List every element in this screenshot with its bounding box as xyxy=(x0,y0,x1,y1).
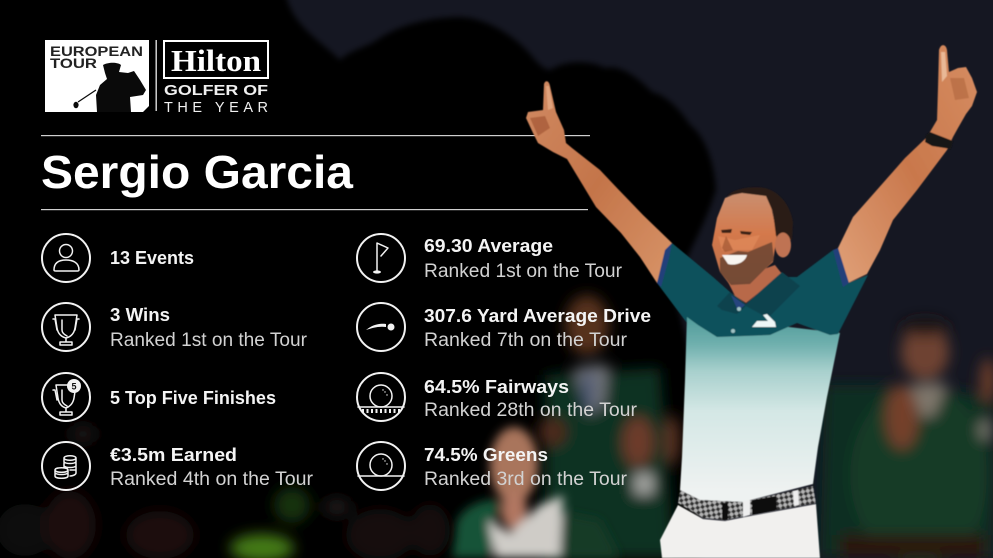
stat: wins xyxy=(42,303,308,351)
stat: driving distance: Ranked 7th on the Tour xyxy=(424,330,628,351)
icon: ball in flight xyxy=(357,303,405,351)
logo: European Tour xyxy=(45,40,149,112)
buckle xyxy=(722,496,777,520)
ear xyxy=(775,232,791,258)
nose shadow xyxy=(722,236,733,252)
white trousers xyxy=(660,504,820,558)
stat: driving distance: 307.6 Yard Average Drive xyxy=(424,305,651,326)
adidas logo xyxy=(752,314,776,327)
shirt dark yoke and sleeves xyxy=(657,243,868,337)
left stats column xyxy=(42,234,314,490)
stat: fairways: Ranked 28th on the Tour xyxy=(424,400,638,421)
neck xyxy=(728,265,782,303)
divider xyxy=(156,40,157,111)
smile xyxy=(722,255,747,265)
belt loops xyxy=(743,490,799,517)
logo: European Tour: TOUR xyxy=(50,56,97,71)
stat: fairways xyxy=(357,373,638,421)
polo shirt xyxy=(657,243,868,502)
blurred crowd, right group xyxy=(820,318,993,558)
icon: ball on green xyxy=(357,442,405,490)
stat: wins: 3 Wins xyxy=(110,304,170,325)
buttons xyxy=(737,307,741,311)
right arm and hand xyxy=(838,45,977,283)
stat: scoring average xyxy=(357,234,623,282)
stat: fairways: 64.5% Fairways xyxy=(424,376,569,397)
wristwatch xyxy=(925,132,953,149)
blurred crowd, centre group xyxy=(538,295,680,558)
icon: trophy xyxy=(42,303,90,351)
player photo: Sergio Garcia celebrating xyxy=(526,45,977,558)
stat: earnings xyxy=(42,442,314,490)
belt xyxy=(678,486,816,520)
horizontal rule above name xyxy=(41,135,590,136)
icon: ball on fairway xyxy=(357,373,405,421)
stat: earnings: €3.5m Earned xyxy=(110,444,237,465)
award title: THE YEAR xyxy=(164,100,268,116)
stat: top five finishes xyxy=(42,373,276,421)
logo: European Tour: EUROPEAN xyxy=(50,44,143,59)
logo: Hilton box: Hilton xyxy=(171,43,261,78)
stat: earnings: Ranked 4th on the Tour xyxy=(110,469,314,490)
icon: golfer silhouette xyxy=(73,63,146,112)
beard stubble xyxy=(720,242,774,285)
stat: greens xyxy=(357,442,628,490)
stat: greens: 74.5% Greens xyxy=(424,444,548,465)
collar xyxy=(717,272,800,318)
hair xyxy=(727,187,793,240)
logos lockup xyxy=(45,40,268,116)
title: player name: Sergio Garcia xyxy=(41,146,353,198)
icon: flag on green xyxy=(357,234,405,282)
stat: driving distance xyxy=(357,303,651,351)
icon: coin stacks xyxy=(42,442,90,490)
stat: events: 13 Events xyxy=(110,247,194,268)
dark tree silhouette xyxy=(0,0,716,558)
cheek highlight xyxy=(718,235,760,250)
stat: events xyxy=(42,234,194,282)
left arm and hand xyxy=(526,81,672,283)
stat: greens: Ranked 3rd on the Tour xyxy=(424,469,628,490)
foreground clapping spectator xyxy=(452,427,620,558)
icon: trophy with five badge: 5 xyxy=(72,382,77,392)
icon: person xyxy=(42,234,90,282)
award title: GOLFER OF xyxy=(164,83,268,99)
stat: scoring average: 69.30 Average xyxy=(424,235,553,256)
blurred crowd, left group xyxy=(0,425,450,558)
eyes xyxy=(721,229,752,235)
horizontal rule below name xyxy=(41,209,588,210)
head xyxy=(712,187,793,285)
stat: wins: Ranked 1st on the Tour xyxy=(110,330,308,351)
sleeve stripes xyxy=(657,243,672,287)
icon: trophy with five badge xyxy=(42,373,90,421)
stat: scoring average: Ranked 1st on the Tour xyxy=(424,261,623,282)
stat: top five finishes: 5 Top Five Finishes xyxy=(110,387,276,408)
award title xyxy=(164,83,268,116)
right stats column xyxy=(357,234,651,490)
